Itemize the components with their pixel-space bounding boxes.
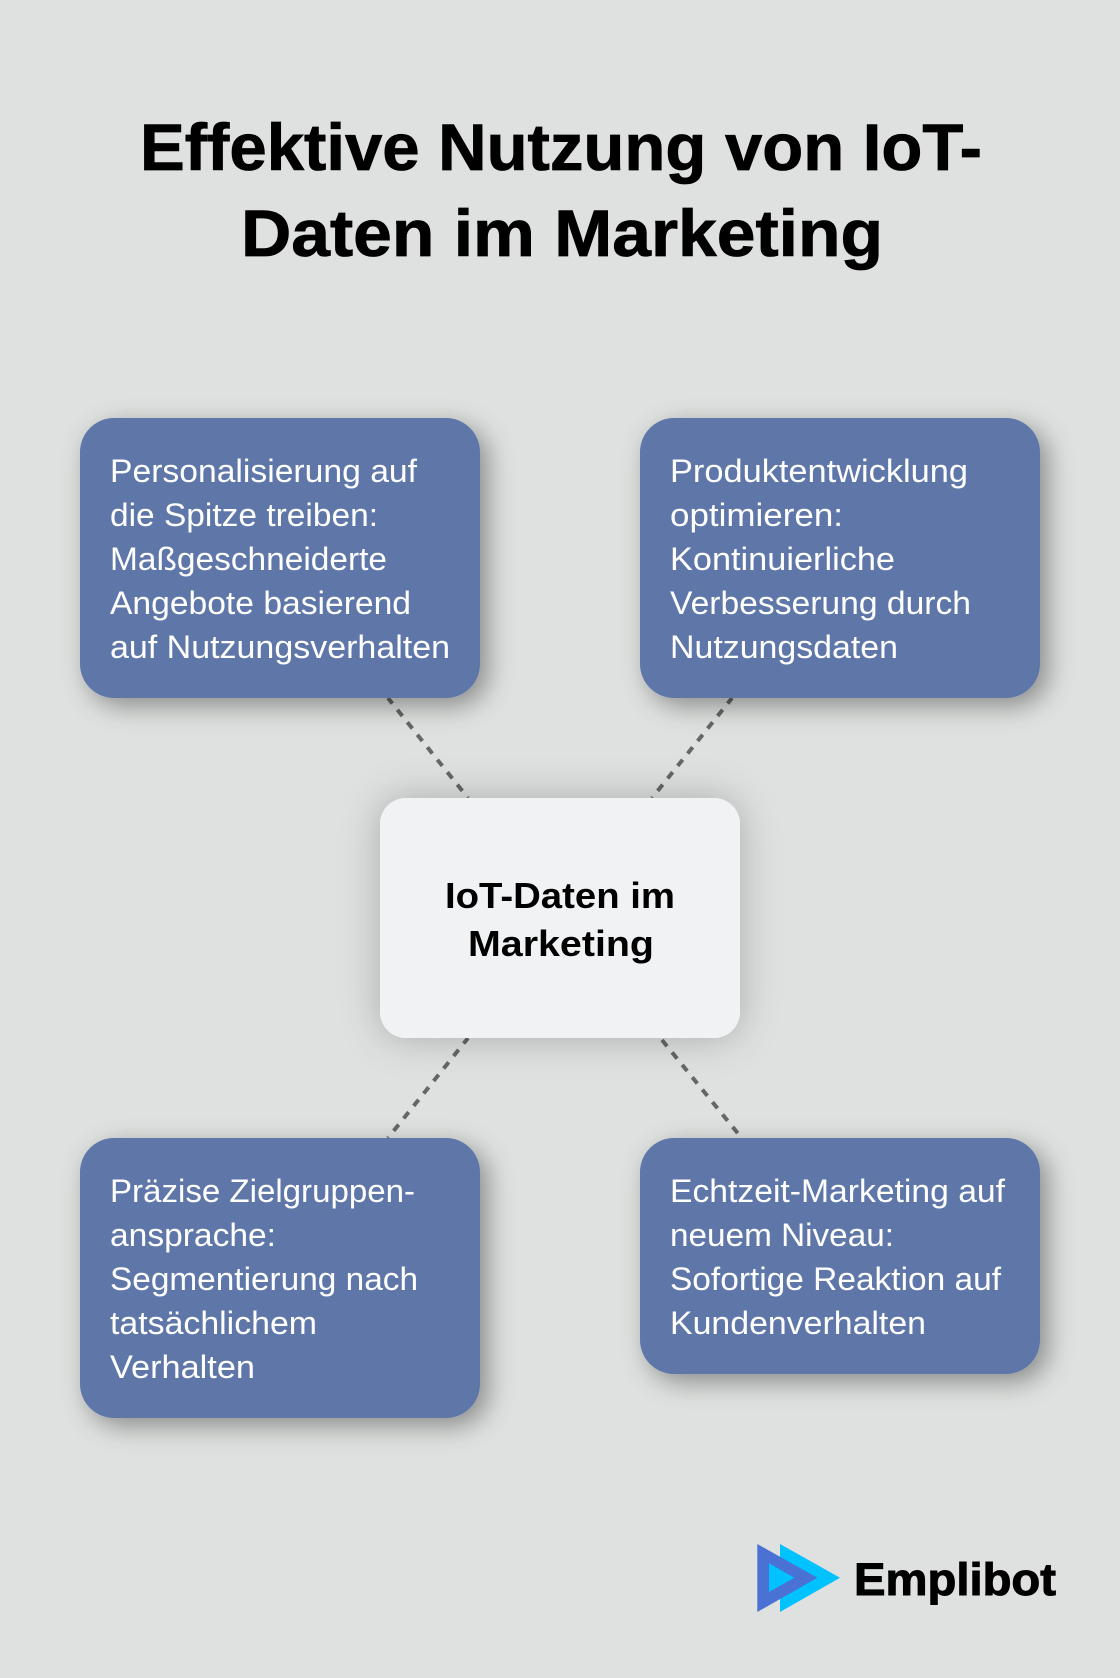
title: Daten im Marketing — [241, 196, 883, 270]
panel: Produktentwicklung: Verbesserung durch — [670, 585, 971, 621]
panel: Echtzeit-Marketing — [640, 1138, 1040, 1374]
panel: Produktentwicklung: Produktentwicklung — [670, 453, 968, 489]
panel: Produktentwicklung — [640, 418, 1040, 698]
panel: Zielgruppenansprache: Verhalten — [110, 1349, 255, 1385]
panel: Produktentwicklung: optimieren: — [670, 497, 843, 533]
panel: center topic: Marketing — [468, 923, 654, 964]
connector: bottom right — [662, 1040, 740, 1136]
connector: top right — [652, 698, 732, 798]
panel: Personalisierung: die Spitze treiben: — [110, 497, 378, 533]
panel: center topic — [380, 798, 740, 1038]
panel: Zielgruppenansprache: Präzise Zielgruppen- — [110, 1173, 415, 1209]
connector: bottom left — [388, 1038, 468, 1138]
panel: Personalisierung: auf Nutzungsverhalten — [110, 629, 450, 665]
panel: Personalisierung: Maßgeschneiderte — [110, 541, 387, 577]
panel: Personalisierung: Angebote basierend — [110, 585, 411, 621]
panel: Produktentwicklung: Nutzungsdaten — [670, 629, 898, 665]
panel: Echtzeit-Marketing: Sofortige Reaktion auf — [670, 1261, 1001, 1297]
title — [140, 110, 982, 270]
panel: Echtzeit-Marketing: neuem Niveau: — [670, 1217, 894, 1253]
panel: Zielgruppenansprache — [80, 1138, 480, 1418]
title: Effektive Nutzung von IoT- — [140, 110, 982, 184]
logo: Emplibot: Emplibot — [854, 1554, 1056, 1605]
panel: Echtzeit-Marketing: Echtzeit-Marketing auf — [670, 1173, 1005, 1209]
panel: Echtzeit-Marketing: Kundenverhalten — [670, 1305, 926, 1341]
logo: Emplibot — [757, 1544, 1056, 1612]
panel: Personalisierung — [80, 418, 480, 698]
panel: Produktentwicklung: Kontinuierliche — [670, 541, 895, 577]
panel: Zielgruppenansprache: Segmentierung nach — [110, 1261, 418, 1297]
connector: top left — [388, 698, 468, 798]
panel: center topic: IoT-Daten im — [445, 875, 675, 916]
panel: Personalisierung: Personalisierung auf — [110, 453, 417, 489]
panel: Zielgruppenansprache: ansprache: — [110, 1217, 276, 1253]
panel: Zielgruppenansprache: tatsächlichem — [110, 1305, 317, 1341]
